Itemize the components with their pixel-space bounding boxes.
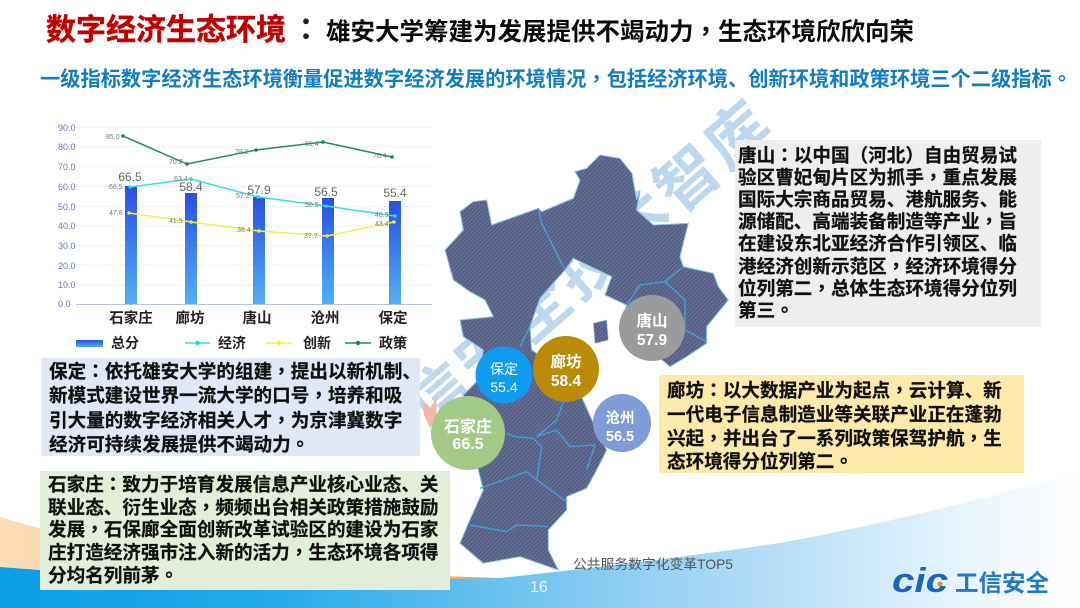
- panel: Tangshan: 验区曹妃甸片区为抓手，重点发展: [738, 167, 1017, 188]
- y axis labels: 90.0: [58, 123, 76, 133]
- bubble: Cangzhou: [593, 394, 651, 452]
- panel: Langfang: [659, 375, 1024, 473]
- bubble: Langfang: [533, 336, 599, 402]
- category labels: 唐山: [242, 309, 272, 327]
- peach wave: [0, 517, 500, 590]
- blue footer wave: [0, 472, 1080, 608]
- category labels: [109, 309, 408, 327]
- y axis labels: 0.0: [58, 299, 71, 309]
- panel: Tangshan: 唐山：以中国（河北）自由贸易试: [738, 145, 1017, 166]
- line: innovation: 43.4: [375, 221, 389, 228]
- bar value labels: 57.9: [247, 183, 271, 197]
- bar value labels: 66.5: [118, 170, 142, 184]
- panel: Tangshan: 国际大宗商品贸易、港航服务、能: [738, 189, 1017, 210]
- watermark: 信安全技术智库: [393, 87, 787, 443]
- title: 数字经济生态环境 雄安大学筹建为发展提供不竭动力，生态环境欣欣向荣: [46, 14, 914, 47]
- legend: [76, 335, 407, 351]
- bubble: Baoding: 保定: [490, 361, 518, 377]
- subtitle: 一级指标数字经济生态环境衡量促进数字经济发展的环境情况，包括经济环境、创新环境和政策环境三个二级指标。: [40, 69, 1072, 91]
- title: ：: [291, 14, 321, 47]
- line: innovation: [109, 210, 396, 240]
- map of Hebei regions: [445, 155, 728, 570]
- y axis labels: 10.0: [58, 280, 76, 290]
- line: economy: 46.5: [375, 212, 389, 219]
- bar value labels: 58.4: [179, 180, 203, 194]
- category labels: 石家庄: [109, 309, 153, 327]
- line: innovation: 38.4: [237, 227, 251, 234]
- bubble: Cangzhou: 56.5: [606, 429, 634, 445]
- bubble: Baoding: 55.4: [490, 379, 518, 395]
- panel: Tangshan: 港经济创新示范区，经济环境得分: [738, 256, 1017, 277]
- y axis labels: 80.0: [58, 142, 76, 152]
- panel: Shijiazhuang: 分均名列前茅。: [48, 565, 178, 586]
- legend: 政策: [379, 335, 407, 351]
- bubble: Tangshan: 唐山: [636, 311, 668, 330]
- line: policy: 85.0: [106, 134, 120, 141]
- y axis labels: 50.0: [58, 202, 76, 212]
- bubble: Shijiazhuang: [431, 396, 505, 470]
- y axis labels: [58, 123, 76, 309]
- panel: Tangshan: 位列第二，总体生态环境得分位列: [738, 278, 1017, 299]
- line: policy: 81.4: [305, 141, 319, 148]
- line: economy: 50.5: [305, 202, 319, 209]
- bubble: Langfang: 58.4: [551, 373, 581, 390]
- panel: Baoding: 经济可持续发展提供不竭动力。: [49, 434, 309, 455]
- bubble: Cangzhou: 沧州: [606, 409, 634, 427]
- y axis labels: 70.0: [58, 162, 76, 172]
- bubble: Tangshan: 57.9: [637, 332, 667, 349]
- line: innovation: 41.5: [169, 218, 183, 225]
- panel: Langfang: 态环境得分位列第二。: [667, 451, 853, 472]
- legend: 总分: [111, 335, 139, 351]
- category labels: 廊坊: [176, 309, 205, 327]
- panel: Baoding: 引大量的数字经济相关人才，为京津冀数字: [49, 410, 402, 431]
- y axis labels: 20.0: [58, 261, 76, 271]
- panel: Langfang: 廊坊：以大数据产业为起点，云计算、新: [667, 380, 1002, 401]
- bars: total score: [125, 186, 401, 304]
- panel: Shijiazhuang: 庄打造经济强市注入新的活力，生态环境各项得: [48, 542, 439, 563]
- bar value labels: 55.4: [383, 186, 407, 200]
- logo: 工信安全: [955, 570, 1049, 596]
- y axis labels: 60.0: [58, 182, 76, 192]
- panel: Shijiazhuang: 石家庄：致力于培育发展信息产业核心业态、关: [48, 474, 439, 495]
- line: economy: [109, 176, 397, 219]
- bubble: Baoding: [476, 346, 532, 404]
- category labels: 沧州: [310, 309, 340, 327]
- bar value labels: [118, 170, 407, 200]
- line: policy: [106, 134, 394, 166]
- line: policy: 70.2: [169, 159, 183, 166]
- bar and line chart: [58, 123, 432, 351]
- line: economy: 63.4: [174, 176, 188, 183]
- panel: Baoding: 保定：依托雄安大学的组建，提出以新机制、: [49, 361, 421, 382]
- panel: Baoding: 新模式建设世界一流大学的口号，培养和吸: [49, 385, 402, 406]
- line: economy: 66.5: [109, 184, 123, 191]
- legend: 创新: [303, 335, 331, 351]
- panel: Shijiazhuang: 发展，石保廊全面创新改革试验区的建设为石家: [48, 519, 439, 540]
- panel: Tangshan: 第三。: [738, 300, 794, 321]
- y axis labels: 40.0: [58, 221, 76, 231]
- category labels: 保定: [378, 309, 408, 327]
- line: policy: 78.2: [235, 149, 249, 156]
- panel: Tangshan: [735, 140, 1041, 327]
- bubble: Shijiazhuang: 66.5: [452, 436, 484, 453]
- panel: Shijiazhuang: [40, 471, 450, 590]
- panel: Langfang: 兴起，并出台了一系列政策保驾护航，生: [667, 428, 1002, 449]
- logo: cic: [892, 562, 948, 600]
- line: policy: 76.4: [373, 153, 387, 160]
- panel: Langfang: 一代电子信息制造业等关联产业正在蓬勃: [667, 404, 1002, 425]
- panel: Shijiazhuang: 联业态、衍生业态，频频出台相关政策措施鼓励: [48, 497, 439, 518]
- page number: 16: [530, 579, 548, 596]
- bar value labels: 56.5: [314, 185, 338, 199]
- line: economy: 57.2: [236, 193, 250, 200]
- footer caption: 公共服务数字化变革TOP5: [573, 557, 733, 572]
- legend: 经济: [218, 335, 246, 351]
- bubble: Shijiazhuang: 石家庄: [444, 417, 492, 436]
- panel: Baoding: [41, 358, 420, 456]
- y axis labels: 30.0: [58, 241, 76, 251]
- bubble: Tangshan: [619, 295, 685, 361]
- line: innovation: 37.7: [304, 233, 318, 240]
- panel: Tangshan: 在建设东北亚经济合作引领区、临: [738, 233, 1017, 254]
- panel: Tangshan: 源储配、高端装备制造等产业，旨: [738, 211, 1017, 232]
- line: innovation: 47.8: [109, 210, 123, 217]
- bubble: Langfang: 廊坊: [550, 352, 582, 371]
